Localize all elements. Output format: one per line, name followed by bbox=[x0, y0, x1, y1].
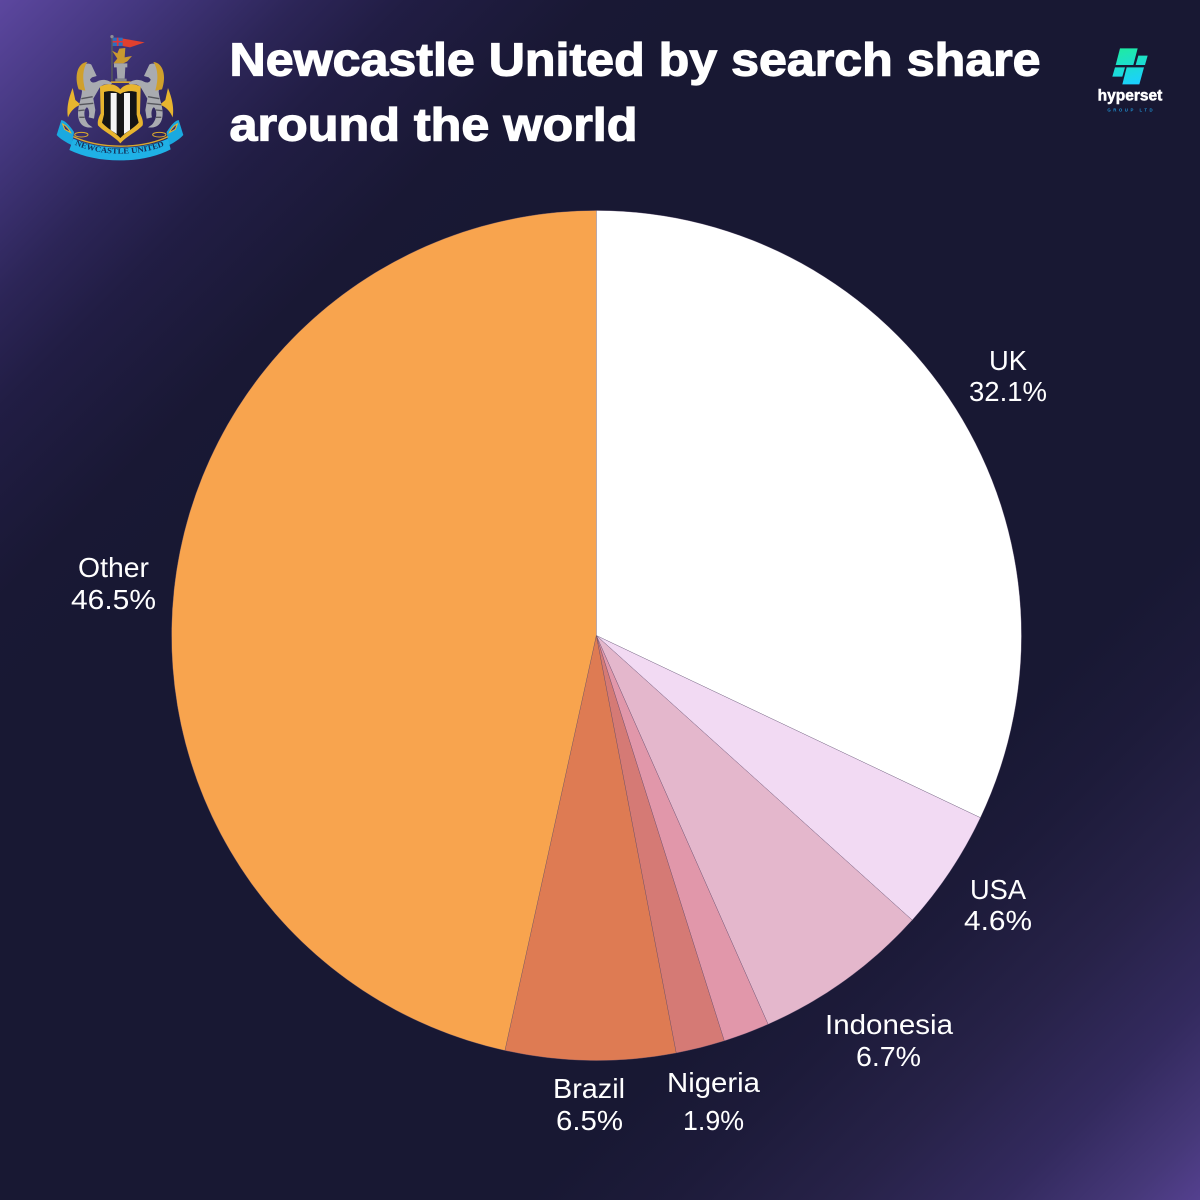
title bbox=[230, 34, 1040, 150]
flag bbox=[110, 35, 145, 81]
label: Indonesia: Indonesia bbox=[825, 1009, 953, 1040]
pie labels bbox=[71, 345, 1047, 1136]
slice: Brazil bbox=[505, 636, 676, 1061]
title: around the world bbox=[230, 98, 638, 150]
label: Other bbox=[71, 552, 156, 615]
label: Nigeria bbox=[667, 1067, 760, 1136]
label: Other: Other bbox=[78, 552, 149, 583]
label: Brazil bbox=[553, 1073, 625, 1136]
seahorse right bbox=[129, 62, 173, 128]
label: USA bbox=[964, 874, 1032, 936]
label: Brazil: 6.5% bbox=[556, 1105, 623, 1136]
label: UK: 32.1% bbox=[969, 376, 1047, 407]
slice: USA bbox=[596, 636, 980, 920]
label: Other: 46.5% bbox=[71, 584, 156, 615]
slice: unlabelled pink bbox=[596, 636, 768, 1041]
slice: Indonesia bbox=[596, 636, 912, 1024]
castle tower and lion bbox=[111, 48, 132, 83]
label: UK: UK bbox=[989, 345, 1027, 376]
scroll text: NEWCASTLE UNITED bbox=[74, 140, 164, 154]
shield bbox=[98, 84, 143, 143]
label: USA: USA bbox=[970, 874, 1026, 905]
pie chart bbox=[172, 210, 1021, 1061]
label: UK bbox=[969, 345, 1047, 407]
label: Nigeria: 1.9% bbox=[683, 1105, 744, 1136]
label: Indonesia: 6.7% bbox=[856, 1041, 921, 1072]
label: Brazil: Brazil bbox=[553, 1073, 625, 1104]
hyperset logo: hyperset bbox=[1098, 88, 1162, 105]
label: USA: 4.6% bbox=[964, 905, 1032, 936]
title: Newcastle United by search share bbox=[230, 34, 1040, 86]
label: Nigeria: Nigeria bbox=[667, 1067, 760, 1098]
seahorse left bbox=[67, 62, 112, 128]
hyperset logo bbox=[1098, 48, 1162, 112]
slice: Other bbox=[172, 210, 596, 1050]
hyperset logo: GROUP LTD bbox=[1107, 107, 1153, 112]
slice: UK bbox=[596, 210, 1021, 818]
label: Indonesia bbox=[825, 1009, 953, 1072]
slice: Nigeria bbox=[596, 636, 724, 1053]
club crest bbox=[56, 35, 184, 160]
